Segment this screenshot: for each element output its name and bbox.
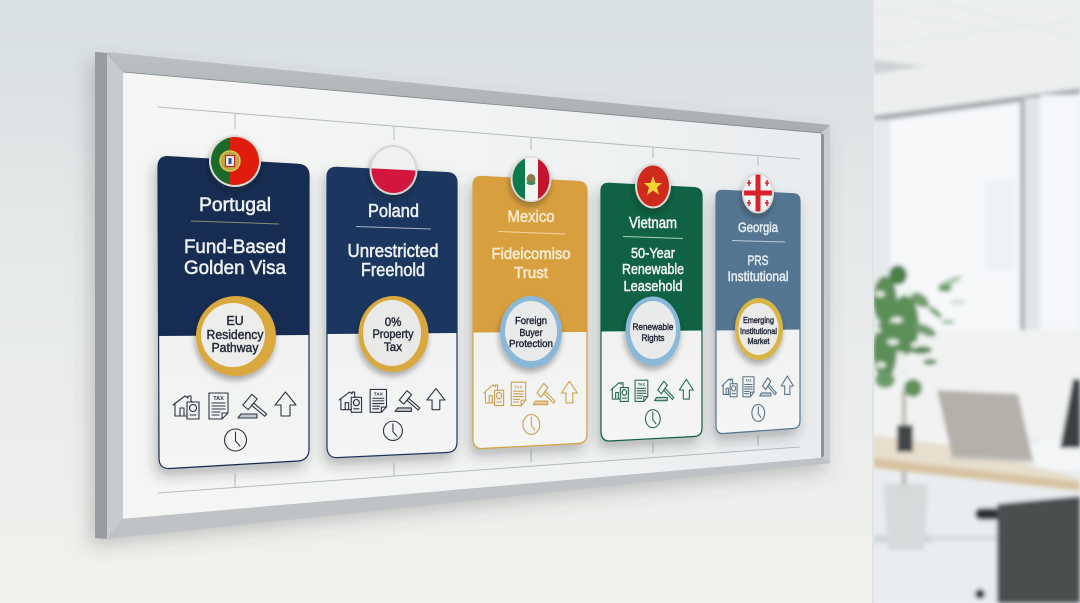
badge: EU Residency Pathway: EU: [226, 314, 244, 328]
icons: Mexico: TAX: [514, 384, 523, 390]
flag: Vietnam: [635, 164, 671, 208]
panel: Portugal: [158, 130, 309, 469]
heading: route: Fideicomiso: [492, 246, 571, 263]
heading: route: PRS: [748, 252, 768, 268]
icons: Georgia: [722, 376, 793, 421]
badge: 0% Property Tax: 0%: [385, 317, 401, 329]
badge: Emerging Institutional Market: [735, 298, 783, 360]
badge: Foreign Buyer Protection: [500, 296, 562, 368]
badge: 0% Property Tax: Tax: [384, 342, 402, 354]
bottom rail: [158, 435, 800, 493]
heading: route: Golden Visa: [184, 257, 286, 279]
flag: Portugal: [205, 130, 265, 190]
panel: Vietnam: [601, 164, 702, 441]
icons: Vietnam: [611, 379, 693, 428]
badge: EU Residency Pathway: Pathway: [212, 341, 259, 355]
heading: route: [492, 246, 571, 282]
country: Mexico: Mexico: [508, 208, 554, 226]
badge: Emerging Institutional Market: Market: [748, 336, 770, 346]
flag: Mexico: [510, 155, 553, 205]
badge: Emerging Institutional Market: Emerging: [743, 315, 774, 325]
country: Vietnam: Vietnam: [629, 215, 677, 232]
icons: Vietnam: TAX: [638, 382, 645, 387]
heading: route: Trust: [514, 265, 549, 282]
flag: Georgia: [740, 170, 776, 216]
icons: Poland: [339, 389, 445, 440]
badge: Renewable Rights: [626, 296, 680, 366]
board surface: [123, 72, 821, 519]
flag: Poland: [366, 145, 420, 200]
heading: route: [348, 241, 438, 280]
icons: Portugal: [173, 392, 296, 451]
icons: Georgia: TAX: [745, 379, 752, 383]
badge: Foreign Buyer Protection: Protection: [509, 339, 553, 350]
badge: EU Residency Pathway: Residency: [206, 328, 264, 342]
heading: route: [622, 245, 684, 295]
badge: Foreign Buyer Protection: Foreign: [515, 316, 547, 327]
badge: Renewable Rights: Rights: [642, 333, 665, 344]
panel: Georgia: [716, 170, 800, 434]
heading: route: Institutional: [728, 268, 788, 284]
wall edge: [872, 0, 874, 603]
badge: 0% Property Tax: Property: [372, 329, 414, 341]
heading: route: [728, 252, 788, 284]
country: Poland: Poland: [368, 201, 419, 221]
heading: route: Leasehold: [624, 278, 682, 295]
badge: EU Residency Pathway: [196, 296, 276, 376]
top rail: [158, 107, 800, 166]
country: Georgia: Georgia: [738, 220, 778, 235]
icons: Poland: TAX: [374, 392, 384, 398]
panel: Mexico: [473, 155, 587, 449]
panel: Poland: [327, 140, 457, 458]
heading: route: Fund-Based: [184, 236, 286, 258]
icons: Mexico: [484, 381, 577, 434]
badge: Foreign Buyer Protection: Buyer: [520, 328, 543, 339]
heading: route: Freehold: [361, 260, 425, 280]
icons: Portugal: TAX: [213, 396, 224, 402]
heading: route: Unrestricted: [348, 241, 438, 261]
badge: 0% Property Tax: [358, 296, 428, 372]
frame: [95, 52, 830, 539]
heading: route: 50-Year: [631, 245, 675, 262]
background: blurred office: [874, 60, 1080, 603]
badge: Renewable Rights: Renewable: [632, 322, 674, 333]
heading: route: [184, 236, 286, 279]
badge: Emerging Institutional Market: Institutional: [740, 326, 777, 336]
country: Portugal: Portugal: [199, 194, 271, 216]
heading: route: Renewable: [622, 261, 684, 278]
